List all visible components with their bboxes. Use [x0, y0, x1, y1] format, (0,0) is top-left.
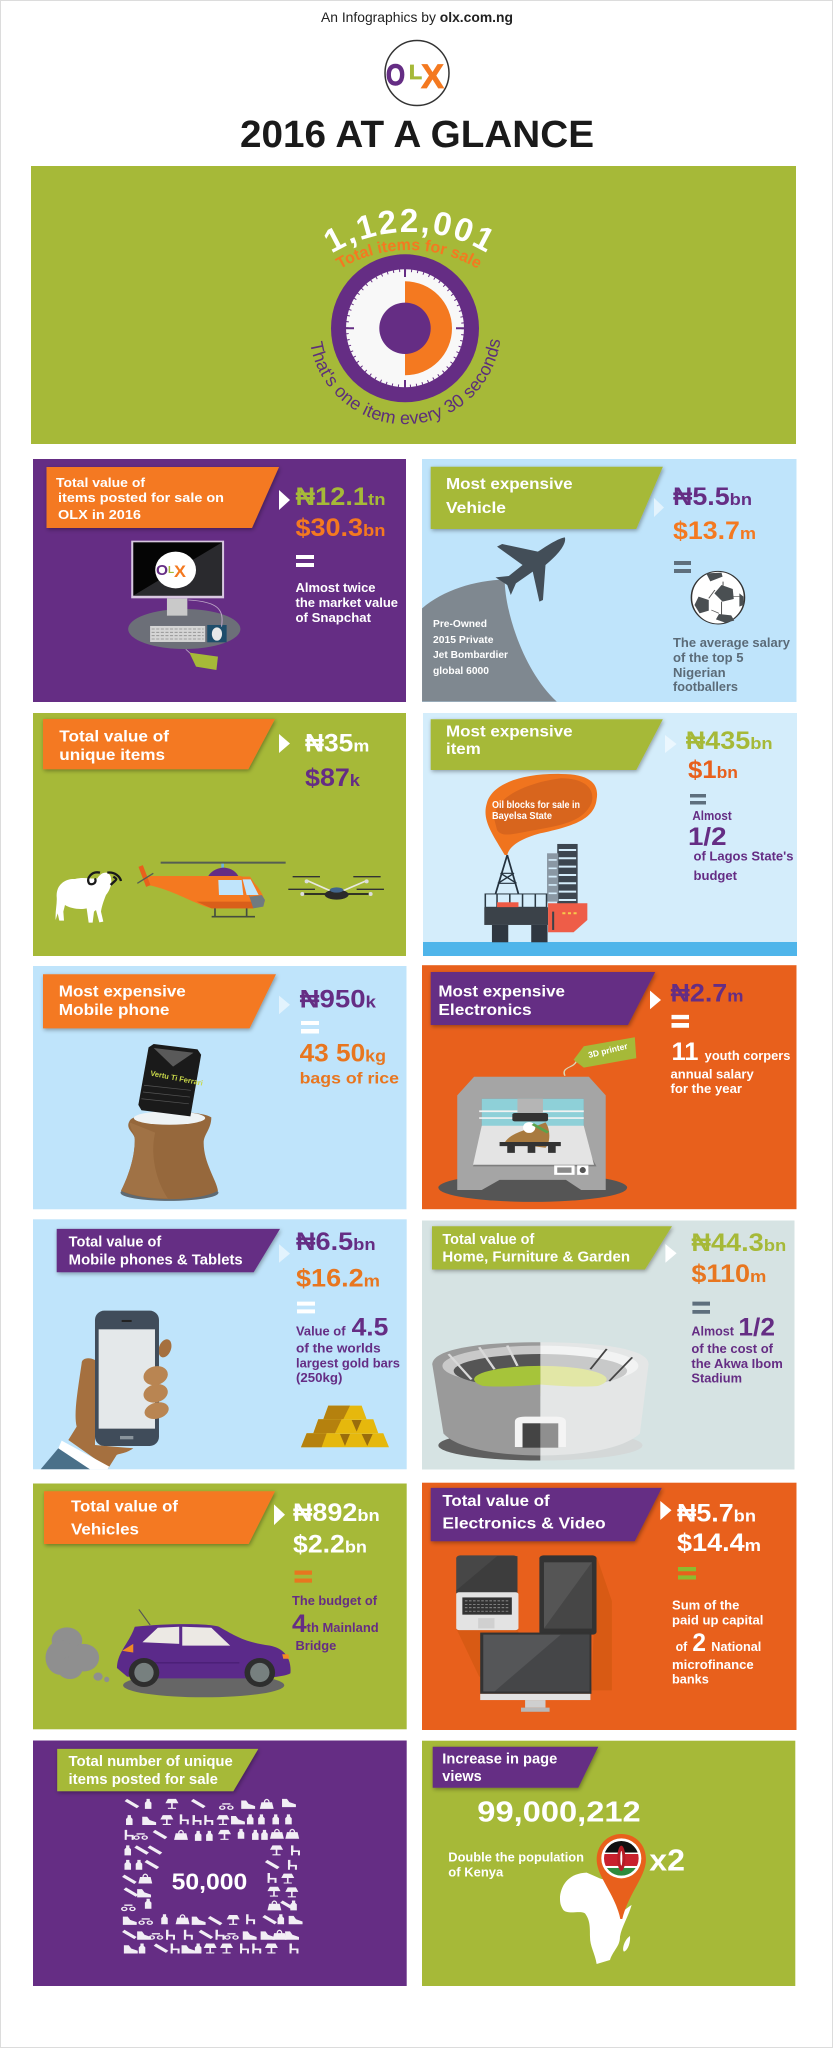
banner: Total value of [442, 1493, 550, 1510]
comparison text: largest gold bars [296, 1356, 400, 1370]
banner: items posted for sale on [58, 491, 224, 505]
logo: OLX: X [421, 58, 444, 96]
icon: clock [331, 254, 479, 402]
banner [43, 719, 275, 769]
plane label: global 6000 [433, 665, 489, 677]
value dollars: $110 m [691, 1260, 766, 1288]
value naira: ₦5.5bn [673, 483, 752, 511]
comparison text: the Akwa Ibom [691, 1357, 783, 1371]
plane label: Pre-Owned [433, 618, 487, 630]
banner [57, 1229, 280, 1272]
value dollars: $30.3 bn [296, 514, 386, 542]
equals [294, 1570, 312, 1583]
value dollars: $87k [305, 764, 361, 792]
comparison text: of Snapchat [296, 611, 372, 625]
comparison text: 1/2 [688, 823, 727, 851]
comparison text: banks [672, 1672, 709, 1686]
comparison text [691, 1313, 783, 1386]
equals [690, 794, 706, 804]
comparison: 43 50kg [300, 1040, 386, 1068]
value dollars: $14.4 m [677, 1529, 761, 1557]
caption: one item every 30 seconds: That's one item every 30 seconds [311, 339, 500, 424]
banner: Most expensive [59, 984, 186, 1001]
banner [46, 467, 279, 528]
bubble label: Bayelsa State [492, 811, 552, 822]
equals [672, 1015, 689, 1028]
panel: unique items posted [33, 1740, 407, 1986]
comparison text: 4.5 [352, 1313, 388, 1341]
panel: unique items [33, 713, 406, 956]
comparison text [672, 1598, 763, 1686]
banner: Vehicles [71, 1522, 139, 1539]
banner [431, 972, 655, 1025]
comparison text [296, 1313, 400, 1385]
panel: most expensive electronics [422, 965, 796, 1209]
icon: computer with OLX screen: L [168, 565, 174, 576]
arrow [650, 991, 661, 1009]
logo: OLX: L [409, 62, 422, 84]
bubble label: Oil blocks for sale in [492, 800, 580, 811]
arrow [279, 996, 290, 1014]
arrow [279, 1244, 290, 1263]
comparison text: Value of [296, 1324, 346, 1338]
comparison text: Almost [692, 809, 732, 823]
equals [297, 1302, 315, 1313]
comparison text [673, 636, 790, 694]
plane label: 2015 Private [433, 634, 494, 646]
value naira: ₦6.5 bn [296, 1228, 376, 1256]
banner: Increase in page [442, 1751, 557, 1767]
value naira: ₦435 bn [686, 727, 773, 755]
comparison text: The average salary [673, 636, 790, 650]
equals [296, 555, 314, 567]
icon: 3D printer [438, 1062, 627, 1202]
arrow [274, 1504, 285, 1525]
icon: ram [56, 872, 121, 923]
panel: vehicles [33, 1484, 407, 1729]
value dollars: $16.2 m [296, 1264, 380, 1292]
comparison text: paid up capital [672, 1613, 763, 1627]
plane label [433, 618, 508, 677]
banner: views [442, 1769, 482, 1785]
equals [301, 1021, 319, 1034]
comparison text [292, 1594, 379, 1653]
icon: football [691, 571, 744, 624]
icon: gold bars [301, 1406, 389, 1447]
panel: total value posted [33, 459, 406, 702]
icon: Kenya location pin [597, 1834, 646, 1919]
icon: laptop, tablet and desktop [456, 1555, 612, 1712]
panel: total items hero [31, 166, 796, 444]
banner: Mobile phone [59, 1002, 170, 1019]
banner: unique items [59, 747, 165, 764]
comparison text [296, 581, 398, 625]
value naira: ₦892 bn [293, 1499, 380, 1527]
icon: helicopter [137, 862, 286, 917]
arrow [654, 498, 664, 517]
icon: car with exhaust smoke [46, 1609, 291, 1697]
value naira: ₦5.7bn [677, 1500, 756, 1528]
icon: phone in rice sack: Vertu Ti Ferrari [150, 1069, 204, 1088]
banner: Vehicle [446, 500, 506, 517]
value naira: ₦12.1 tn [296, 483, 386, 511]
comparison text: footballers [673, 680, 738, 694]
comparison text: annual salary [670, 1068, 754, 1082]
value naira: ₦2.7m [670, 980, 744, 1008]
comparison text: of the worlds [296, 1341, 381, 1355]
value naira: ₦35m [305, 730, 369, 758]
equals [674, 561, 691, 573]
comparison text: 4 [292, 1610, 307, 1638]
banner: Total value of [442, 1232, 534, 1248]
comparison text: Sum of the [672, 1598, 739, 1612]
banner: Total value of [56, 476, 146, 490]
banner: Total number of unique [68, 1754, 233, 1770]
comparison text: the market value [296, 596, 398, 610]
comparison text: (250kg) [296, 1371, 342, 1385]
comparison text: of the cost of [691, 1342, 774, 1356]
arrow [665, 1244, 677, 1263]
panel: most expensive item [423, 713, 797, 956]
banner: items posted for sale [68, 1772, 218, 1788]
comparison text: budget [694, 869, 738, 883]
banner [57, 1749, 258, 1791]
comparison text: th Mainland [307, 1621, 379, 1635]
arrow [660, 1501, 672, 1520]
equals [692, 1302, 710, 1314]
comparison: bags of rice [300, 1070, 399, 1088]
icon: plane with smoke trail [422, 537, 565, 702]
comparison text: Almost twice [296, 581, 376, 595]
banner: Total value of [71, 1498, 179, 1515]
banner: Electronics [438, 1002, 532, 1019]
icon: oil rig [484, 844, 587, 942]
comparison text: of [676, 1640, 688, 1654]
value naira: ₦950 k [300, 986, 377, 1014]
icon grid: assorted items [121, 1799, 303, 1953]
icon: stadium [432, 1342, 649, 1461]
panel: home furniture and garden [422, 1220, 794, 1470]
logo: OLX: O [386, 59, 405, 92]
plane label: Jet Bombardier [433, 649, 508, 661]
comparison text: microfinance [672, 1658, 754, 1672]
arrow [279, 734, 290, 753]
total number: 1,122,001 [324, 208, 492, 253]
banner: item [446, 741, 481, 758]
tag: 3D printer: 3D printer [587, 1041, 629, 1060]
bubble label [492, 800, 580, 822]
banner [432, 1226, 672, 1270]
comparison text [670, 1038, 790, 1096]
banner: Home, Furniture & Garden [442, 1250, 630, 1266]
equals [678, 1567, 696, 1580]
comparison text: Stadium [691, 1372, 742, 1386]
comparison text: 11 [672, 1038, 699, 1066]
comparison text [448, 1851, 584, 1880]
comparison text: for the year [670, 1082, 742, 1096]
banner: Electronics & Video [442, 1516, 606, 1532]
panel: mobile phones and tablets [33, 1219, 407, 1469]
comparison text: Bridge [296, 1639, 336, 1653]
value dollars: $1bn [688, 756, 738, 784]
icon: computer with OLX screen: O [156, 562, 168, 579]
credit line: An Infographics by olx.com.ng [321, 9, 513, 25]
comparison text: Nigerian [673, 666, 726, 680]
comparison text: of Kenya [448, 1866, 504, 1880]
multiplier: x2 [649, 1843, 685, 1878]
banner: Most expensive [446, 476, 573, 493]
panel: electronics and video [422, 1483, 796, 1730]
panel: most expensive mobile phone [33, 966, 406, 1209]
page view count: 99,000,212 [477, 1797, 641, 1829]
icon: computer with OLX screen [128, 541, 240, 670]
banner [431, 1488, 662, 1541]
total number: 50,000 [172, 1868, 247, 1894]
banner [433, 1747, 598, 1788]
icon: computer with OLX screen: X [174, 562, 187, 581]
comparison text: 1/2 [738, 1313, 775, 1341]
comparison [300, 1040, 399, 1088]
value dollars: $2.2bn [293, 1531, 367, 1559]
icon: hand holding phone [41, 1311, 174, 1469]
arrow [665, 735, 677, 753]
comparison text: Double the population [448, 1851, 584, 1865]
panel: most expensive vehicle [422, 459, 796, 702]
value dollars: $13.7 m [673, 517, 756, 545]
icon: oil burst bubble [485, 774, 597, 855]
banner: Most expensive [438, 984, 565, 1001]
caption: total items for sale: Total items for sale [334, 240, 480, 268]
banner: OLX in 2016 [58, 508, 141, 522]
value naira: ₦44.3 bn [691, 1229, 786, 1257]
banner: Mobile phones & Tablets [69, 1252, 243, 1268]
comparison text: National [711, 1640, 761, 1654]
comparison text: of the top 5 [673, 651, 744, 665]
title: 2016 AT A GLANCE [240, 114, 594, 156]
comparison text: of Lagos State's [694, 850, 794, 864]
banner [44, 1491, 275, 1544]
comparison text: 2 [692, 1629, 706, 1657]
comparison text: Almost [691, 1324, 735, 1338]
icon: phone in rice sack [121, 1044, 218, 1201]
banner [431, 719, 663, 770]
comparison text [688, 809, 794, 883]
banner: Total value of [69, 1234, 161, 1250]
tag: 3D printer [574, 1037, 636, 1068]
banner: Total value of [59, 729, 170, 746]
banner [431, 467, 663, 529]
icon: drone [288, 877, 384, 900]
banner [43, 974, 276, 1028]
arrow [279, 490, 290, 510]
logo: OLX [385, 40, 449, 106]
comparison text: The budget of [292, 1594, 378, 1608]
banner: Most expensive [446, 724, 573, 741]
panel: page views [422, 1741, 795, 1986]
icon: Africa map [560, 1873, 632, 1964]
comparison text: youth corpers [705, 1049, 790, 1063]
